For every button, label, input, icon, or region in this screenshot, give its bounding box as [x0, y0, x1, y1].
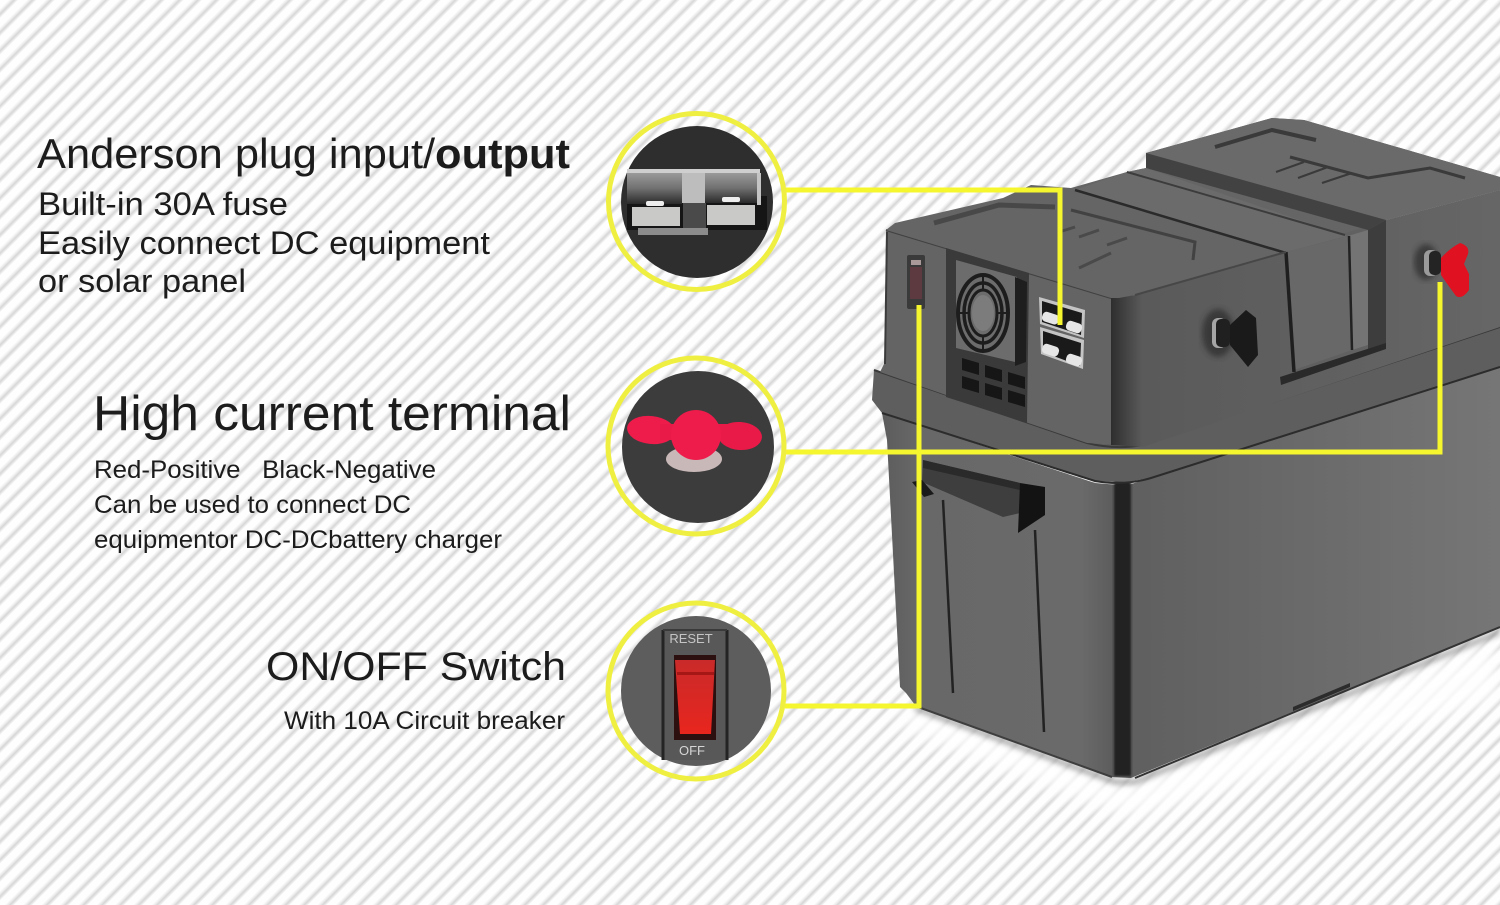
box lower body [882, 367, 1500, 778]
connector: terminal [785, 282, 1440, 452]
upper lid right face [1111, 190, 1500, 447]
description: Anderson plug: Built-in 30A fuse [38, 186, 288, 222]
Anderson ports on box [1039, 297, 1085, 369]
description: High current terminal [94, 456, 502, 554]
box rim [872, 327, 1500, 483]
vent slots [962, 358, 1025, 407]
connector: switch [785, 305, 919, 706]
text block: High current terminal [93, 387, 571, 554]
callout circle: on/off switch [608, 603, 784, 779]
fan grille [958, 275, 1008, 351]
description: Anderson plug: Easily connect DC equipment [38, 225, 490, 261]
callout circle: red terminal [608, 358, 784, 534]
description: Anderson plug: or solar panel [38, 263, 246, 299]
red terminal [1414, 243, 1469, 297]
heading: High current terminal: High current terminal [93, 387, 571, 441]
text block: ON/OFF Switch [266, 645, 566, 735]
description: High current terminal: equipmentor DC-DCbattery charger [94, 526, 502, 554]
lid top surface [886, 118, 1500, 298]
switch RESET label: RESET [669, 631, 713, 646]
description: ON/OFF Switch: With 10A Circuit breaker [284, 707, 565, 735]
switch OFF label: OFF [679, 743, 705, 758]
heading: ON/OFF Switch: ON/OFF Switch [266, 645, 566, 689]
black terminal [1202, 309, 1258, 367]
fan housing [946, 248, 1029, 423]
text block: Anderson plug [37, 130, 570, 299]
handle [912, 460, 1045, 732]
description: High current terminal: Can be used to connect DC [94, 491, 411, 519]
description: High current terminal: Red-Positive Black-Negative [94, 456, 436, 484]
yellow connector lines [785, 190, 1440, 706]
callout circle: Anderson plug [608, 114, 784, 290]
upper lid left face [880, 230, 1125, 445]
heading: Anderson plug: Anderson plug input/ output [37, 130, 570, 177]
floor shadow [900, 632, 1500, 820]
rocker switch on box [907, 255, 925, 309]
description: Anderson plug [38, 186, 490, 299]
battery box product [872, 118, 1500, 778]
connector: Anderson plug [785, 190, 1060, 325]
